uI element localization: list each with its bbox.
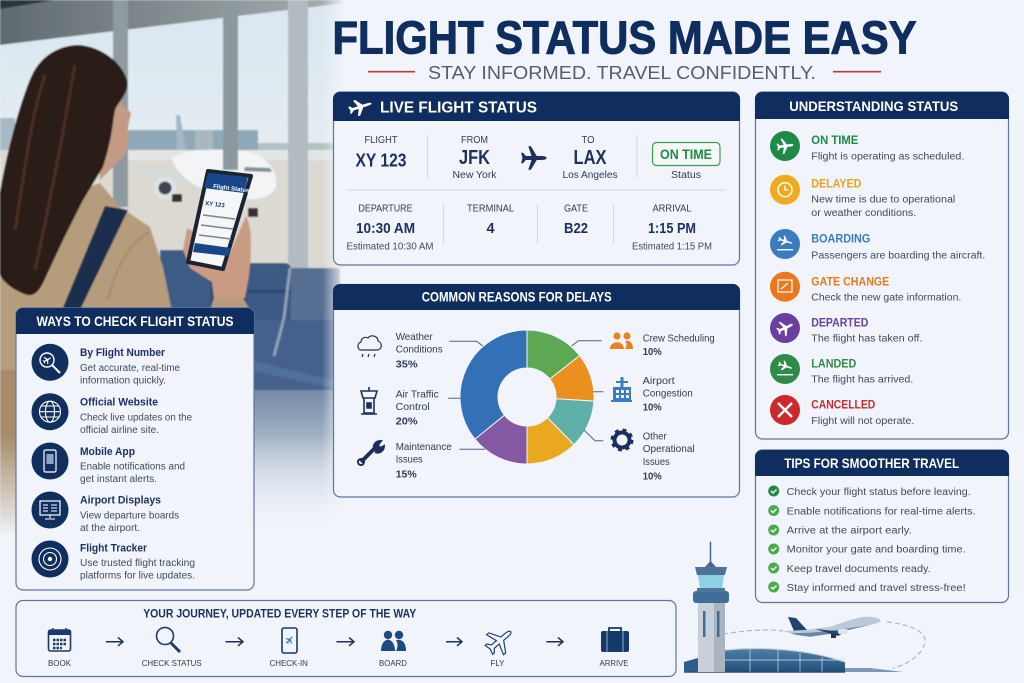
- icon: gear: [612, 430, 632, 450]
- status: on time: Flight is operating as scheduled.: [811, 152, 964, 162]
- step: board: [379, 631, 407, 668]
- arrow: [106, 638, 123, 646]
- icon: wrench: [358, 441, 384, 465]
- status: boarding: Passengers are boarding the aircraft.: [811, 250, 985, 261]
- heading: common reasons for delays: COMMON REASONS FOR DELAYS: [422, 290, 612, 304]
- panel: ways to check flight status: [16, 308, 254, 590]
- method: mobile app: get instant alerts.: [80, 474, 157, 485]
- tip list: Check your flight status before leaving.: [787, 487, 971, 498]
- method: by flight number: [32, 344, 180, 387]
- gate: [564, 202, 588, 237]
- legend: other operational issues: 10%: [643, 470, 662, 482]
- legend: airport congestion: Airport: [643, 375, 675, 387]
- panel: understanding status: [755, 92, 1009, 439]
- step: book: BOOK: [48, 658, 71, 668]
- arrival: Estimated 1:15 PM: [632, 242, 712, 252]
- step: arrive: ARRIVE: [600, 658, 629, 668]
- status: departed: DEPARTED: [811, 318, 868, 330]
- status: cancelled: CANCELLED: [811, 400, 875, 412]
- destination: [562, 134, 618, 181]
- origin: JFK: [459, 147, 490, 169]
- legend: weather conditions: 35%: [396, 358, 418, 370]
- arrow: [336, 638, 354, 646]
- legend: crew scheduling: 10%: [643, 346, 662, 358]
- legend: maintenance issues: Issues: [396, 454, 423, 466]
- method: by flight number: Get accurate, real-time: [80, 363, 180, 374]
- method: flight tracker: [32, 540, 195, 582]
- panel: common reasons for delays: [333, 284, 740, 497]
- method: mobile app: Enable notifications and: [80, 461, 185, 472]
- step: board: BOARD: [379, 658, 407, 668]
- hair: [0, 45, 127, 295]
- step: arrive: [600, 628, 629, 668]
- hand: [183, 216, 251, 298]
- status badge: Status: [671, 169, 701, 181]
- legend: other operational issues: Operational: [643, 443, 695, 455]
- status: departed: [770, 313, 922, 345]
- legend: crew scheduling: Crew Scheduling: [643, 332, 715, 344]
- icon: control tower: [361, 387, 377, 414]
- legend: other operational issues: [643, 430, 695, 482]
- method: by flight number: By Flight Number: [80, 347, 166, 359]
- legend: air traffic control: Air Traffic: [396, 388, 439, 400]
- icon: airport building: [611, 377, 632, 402]
- photo: traveler checking phone at airport window: [0, 0, 360, 540]
- destination: Los Angeles: [562, 169, 618, 181]
- departure: 10:30 AM: [356, 221, 415, 237]
- method: mobile app: [32, 442, 185, 485]
- tip list: Stay informed and travel stress-free!: [787, 583, 966, 594]
- step: fly: FLY: [490, 658, 505, 668]
- photo fades: [0, 0, 360, 540]
- method: official website: Check live updates on the: [80, 412, 192, 423]
- gate: GATE: [564, 202, 588, 214]
- panel: live flight status: [333, 92, 740, 265]
- flight number: [356, 134, 406, 170]
- method: airport displays: [32, 492, 179, 534]
- destination: LAX: [574, 147, 607, 169]
- method: official website: Official Website: [80, 396, 158, 408]
- legend: maintenance issues: [396, 441, 452, 480]
- tip list: Keep travel documents ready.: [787, 564, 931, 575]
- terminal: TERMINAL: [467, 202, 514, 214]
- icon: crew: [610, 332, 633, 349]
- legend: air traffic control: [396, 388, 439, 428]
- legend: air traffic control: Control: [396, 401, 430, 413]
- heading: tips: TIPS FOR SMOOTHER TRAVEL: [784, 455, 960, 471]
- legend: other operational issues: Other: [643, 430, 667, 442]
- terminal: [467, 202, 514, 237]
- legend: air traffic control: 20%: [396, 416, 418, 428]
- method: official website: official airline site.: [80, 425, 159, 436]
- status badge: [652, 142, 720, 181]
- icon: plane taking off: [347, 96, 374, 118]
- step: check status: [142, 628, 202, 668]
- airplane outside: [129, 115, 276, 217]
- subtitle: STAY INFORMED. TRAVEL CONFIDENTLY.: [428, 63, 816, 83]
- status: boarding: [770, 229, 985, 261]
- status: on time: ON TIME: [811, 135, 859, 147]
- arrow: [226, 638, 243, 646]
- tip list: [787, 487, 976, 594]
- status: boarding: BOARDING: [811, 234, 870, 246]
- status: gate change: [770, 272, 961, 304]
- legend: crew scheduling: [643, 332, 715, 358]
- legend: airport congestion: 10%: [643, 402, 662, 414]
- heading: live flight status: LIVE FLIGHT STATUS: [380, 100, 537, 116]
- bag strap: [62, 206, 128, 310]
- step: book: [48, 628, 71, 668]
- legend: other operational issues: Issues: [643, 456, 670, 468]
- step: fly: [481, 622, 519, 668]
- status: cancelled: [770, 395, 914, 427]
- panel: journey steps: [16, 600, 676, 676]
- legend: airport congestion: [643, 375, 693, 414]
- status: delayed: New time is due to operational: [811, 195, 955, 206]
- status: delayed: DELAYED: [811, 178, 861, 190]
- status: landed: [770, 354, 913, 386]
- method: by flight number: information quickly.: [80, 376, 166, 387]
- method: flight tracker: Flight Tracker: [80, 543, 148, 555]
- legend: airport congestion: Congestion: [643, 388, 693, 400]
- method: airport displays: at the airport.: [80, 523, 140, 534]
- heading: ways to check: WAYS TO CHECK FLIGHT STATUS: [36, 314, 234, 329]
- icon: rain cloud: [358, 336, 381, 357]
- arrival: 1:15 PM: [648, 221, 696, 237]
- neck and face: [98, 92, 131, 180]
- illustration: control tower and terminal: [684, 542, 925, 673]
- gate: B22: [564, 221, 588, 237]
- method: flight tracker: platforms for live updates.: [80, 571, 195, 582]
- method: airport displays: View departure boards: [80, 510, 179, 521]
- status badge: ON TIME: [660, 147, 712, 162]
- status: departed: The flight has taken off.: [811, 334, 922, 345]
- step: check status: CHECK STATUS: [142, 658, 202, 668]
- legend: weather conditions: Conditions: [396, 344, 443, 356]
- departure: [346, 202, 434, 252]
- terminal: 4: [486, 221, 495, 237]
- arrival: [632, 202, 712, 252]
- tip list: Enable notifications for real-time alerts.: [787, 506, 976, 517]
- departure: Estimated 10:30 AM: [346, 242, 434, 252]
- phone: XY 123: [205, 201, 226, 209]
- donut chart: [460, 330, 594, 464]
- status: landed: The flight has arrived.: [811, 375, 913, 386]
- status: landed: LANDED: [811, 359, 856, 371]
- legend: maintenance issues: Maintenance: [396, 441, 452, 453]
- arrow: [446, 638, 462, 646]
- phone: [188, 171, 251, 269]
- method: official website: [32, 393, 192, 436]
- jacket: [0, 183, 176, 535]
- title: FLIGHT STATUS MADE EASY: [332, 12, 916, 64]
- method: mobile app: Mobile App: [80, 446, 135, 458]
- status: cancelled: Flight will not operate.: [811, 416, 914, 427]
- legend: weather conditions: [396, 331, 443, 370]
- illustration: airplane in flight: [783, 617, 881, 638]
- departure: DEPARTURE: [358, 202, 412, 214]
- heading: understanding status: UNDERSTANDING STATUS: [789, 98, 958, 114]
- status: delayed: [770, 175, 955, 219]
- destination: TO: [582, 134, 594, 146]
- legend: weather conditions: Weather: [396, 331, 433, 343]
- origin: [452, 134, 497, 181]
- floor under seats: [160, 385, 350, 535]
- status: gate change: Check the new gate information.: [811, 292, 961, 304]
- arrow: [546, 638, 563, 646]
- status: delayed: or weather conditions.: [811, 208, 916, 219]
- phone: Flight Status: [213, 184, 250, 194]
- origin: FROM: [461, 134, 488, 146]
- seats: [160, 250, 210, 320]
- method: flight tracker: Use trusted flight tracking: [80, 558, 195, 569]
- icon: route plane: [521, 146, 546, 170]
- panel: tips for smoother travel: [755, 450, 1009, 602]
- step: check-in: CHECK-IN: [269, 658, 308, 668]
- method: airport displays: Airport Displays: [80, 495, 161, 507]
- flight number: XY 123: [356, 150, 406, 170]
- tip list: Monitor your gate and boarding time.: [787, 545, 966, 556]
- step: check-in: [269, 628, 308, 668]
- tip checkmarks: [768, 486, 779, 592]
- status: gate change: GATE CHANGE: [811, 276, 890, 288]
- tip list: Arrive at the airport early.: [787, 525, 912, 536]
- arrival: ARRIVAL: [652, 202, 692, 214]
- status: on time: [770, 131, 964, 162]
- flight number: FLIGHT: [364, 134, 398, 146]
- heading: journey: YOUR JOURNEY, UPDATED EVERY STEP OF THE WAY: [143, 607, 416, 621]
- legend: maintenance issues: 15%: [396, 468, 417, 480]
- origin: New York: [452, 169, 497, 181]
